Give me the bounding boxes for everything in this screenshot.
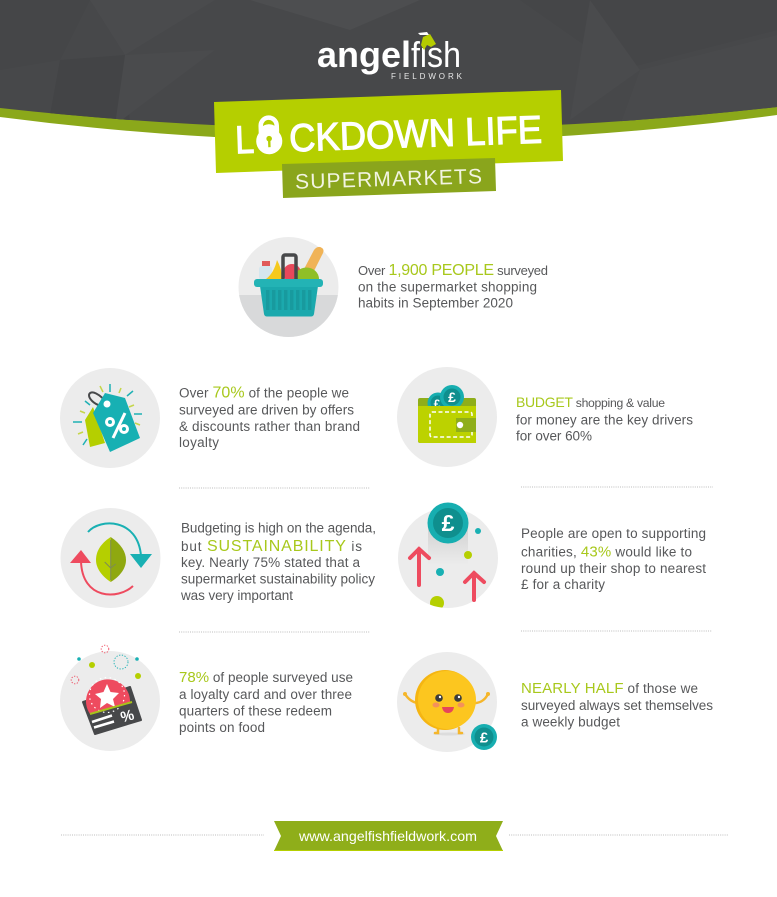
icon: pound coin and rising arrows (398, 502, 498, 610)
footer rule (61, 834, 264, 836)
panel: sustainability (60, 508, 376, 608)
text: charities: People are open to supporting (521, 526, 706, 541)
text: sustainability: key. Nearly 75% stated that a (181, 555, 360, 570)
header background (0, 0, 777, 142)
subtitle banner: SUPERMARKETS (295, 165, 482, 194)
text: charities (521, 526, 706, 592)
title: Lockdown Life: CKDOWN LIFE (288, 109, 543, 160)
icon: loyalty card (60, 645, 160, 751)
text: weekly budget: a weekly budget (521, 714, 620, 730)
footer ribbon (274, 821, 503, 851)
text: charities: £ for a charity (521, 577, 605, 592)
icon: smiling coin: £ (480, 730, 489, 746)
text: offers (179, 384, 360, 450)
icon: loyalty card: % (119, 707, 136, 726)
text: offers: & discounts rather than brand (179, 419, 360, 434)
icon: price tags (60, 368, 160, 468)
divider (179, 631, 370, 633)
icon: angelfish (418, 32, 436, 50)
icon: shopping basket (238, 237, 340, 340)
text: charities: charities, 43% would like to (521, 544, 692, 560)
logo: angel (317, 34, 411, 75)
title: Lockdown Life: O (256, 118, 282, 162)
text: loyalty: a loyalty card and over three (179, 687, 352, 702)
panel: weekly budget (397, 652, 713, 752)
text: budget: for over 60% (516, 428, 592, 444)
text: weekly budget: NEARLY HALF of those we (521, 680, 698, 697)
icon: pound coin and rising arrows: £ (442, 510, 455, 536)
logo: FIELDWORK (391, 72, 463, 81)
panel: loyalty card (60, 645, 353, 751)
footer ribbon: www.angelfishfieldwork.com (298, 828, 477, 844)
title: Lockdown Life: L (234, 119, 255, 162)
subtitle banner (282, 158, 496, 198)
text: offers: loyalty (179, 435, 219, 450)
text: sustainability (180, 520, 376, 603)
panel: offers and discounts (60, 368, 360, 468)
text: offers: Over 70% of the people we (179, 384, 349, 402)
text: loyalty: points on food (179, 720, 265, 735)
icon: leaf and recycling arrows (60, 508, 160, 608)
icon: wallet (397, 367, 497, 467)
icon: wallet: £ (448, 389, 456, 405)
text: survey size: Over 1,900 PEOPLE surveyed (358, 262, 548, 279)
divider (179, 487, 370, 489)
text: loyalty (179, 669, 353, 735)
text: charities: round up their shop to nearest (521, 561, 706, 576)
text: budget (516, 394, 693, 444)
title banner (214, 90, 563, 173)
logo (317, 32, 463, 81)
logo: fish (411, 34, 461, 75)
icon: wallet: £ (434, 397, 441, 411)
text: sustainability: Budgeting is high on the agenda, (181, 520, 376, 536)
text: budget: BUDGET shopping & value (516, 394, 665, 410)
text: survey size: on the supermarket shopping (358, 280, 537, 294)
panel: survey intro (238, 237, 548, 340)
text: loyalty: 78% of people surveyed use (179, 669, 353, 686)
text: sustainability: supermarket sustainability policy (181, 572, 375, 586)
panel: charities (398, 502, 706, 610)
text: offers: surveyed are driven by offers (179, 402, 354, 418)
text: sustainability: but SUSTAINABILITY is (181, 538, 362, 555)
icon: padlock (256, 117, 282, 154)
text: loyalty: quarters of these redeem (179, 704, 332, 718)
text: budget: for money are the key drivers (516, 412, 693, 428)
text: survey size (358, 262, 548, 310)
text: weekly budget (521, 680, 713, 730)
text: survey size: habits in September 2020 (358, 296, 513, 310)
icon: smiling coin (397, 652, 497, 752)
text: sustainability: was very important (180, 588, 293, 603)
text: weekly budget: surveyed always set themselves (521, 698, 713, 713)
panel: budget shopping (397, 367, 693, 467)
